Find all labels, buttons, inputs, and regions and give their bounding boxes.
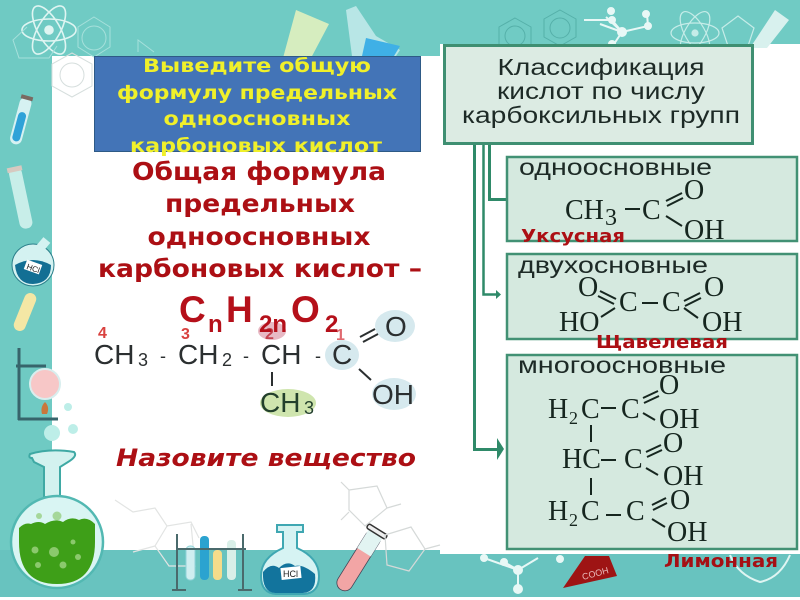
acetic acid formula: 3 — [605, 205, 617, 231]
panel: monobasic acids — [507, 154, 797, 247]
oxalic acid formula — [559, 272, 742, 338]
arrows: connectors — [474, 143, 508, 460]
white molecule bottom right — [481, 555, 563, 593]
citric acid formula — [548, 370, 707, 548]
acetic acid formula: CH — [565, 195, 604, 226]
structural formula with numbered carbons: CH — [261, 339, 301, 370]
panel: dibasic acids — [507, 252, 797, 353]
oxalic acid formula: OH — [702, 307, 742, 338]
icon: HCl flask left: HCl — [25, 262, 41, 275]
panel: task heading: одноосновных — [164, 108, 350, 130]
citric acid formula: 2 — [569, 510, 578, 530]
icon: pink test tube — [331, 524, 388, 595]
general formula text — [98, 157, 422, 283]
panel: task heading — [94, 55, 420, 157]
citric acid formula: C — [621, 394, 640, 425]
faint molecule bottom right — [341, 482, 440, 571]
formula CnH2nO2: O — [291, 289, 320, 330]
panel: task heading: Выведите общую — [143, 55, 371, 77]
icon: beaker — [283, 10, 329, 58]
icon: red flask bottom: COOH — [581, 565, 610, 582]
icon: green round flask — [11, 450, 103, 588]
formula CnH2nO2: C — [179, 289, 206, 330]
icon: atom top right — [671, 7, 754, 59]
citric acid formula: C — [581, 496, 600, 527]
structural formula with numbered carbons: 3 — [304, 398, 314, 418]
citric acid formula: H — [548, 394, 568, 425]
panel: classification title: Классификация — [498, 54, 704, 80]
icon: blue test tube — [9, 94, 33, 146]
oxalic acid formula: O — [578, 272, 598, 303]
icon: rising bubbles — [44, 403, 78, 441]
icon: HCl flask bottom: HCl — [283, 569, 298, 579]
structural formula with numbered carbons: CH — [94, 339, 134, 370]
acetic acid formula: C — [642, 195, 661, 226]
citric acid formula: C — [624, 444, 643, 475]
icon: pale test tube — [7, 165, 35, 230]
icon: flask corner bottom right — [730, 555, 790, 582]
oxalic acid formula: O — [704, 272, 724, 303]
citric acid formula: OH — [667, 517, 707, 548]
citric acid formula: OH — [663, 461, 703, 492]
icon: yellow test tube — [12, 291, 38, 333]
faint molecule bottom left — [115, 500, 199, 566]
general formula text: одноосновных — [148, 222, 370, 251]
structural formula with numbered carbons: - — [315, 346, 321, 366]
formula CnH2nO2: H — [226, 289, 253, 330]
general formula text: Общая формула — [132, 157, 386, 186]
structural formula with numbered carbons: - — [160, 346, 166, 366]
acid name: acetic: Уксусная — [521, 226, 625, 247]
call to action: Назовите вещество — [116, 444, 416, 472]
panel: polybasic acids — [507, 352, 797, 549]
structural formula with numbered carbons: O — [385, 311, 407, 342]
general formula text: карбоновых кислот – — [98, 254, 422, 283]
structural formula with numbered carbons: C — [332, 339, 352, 370]
structural formula with numbered carbons: 3 — [138, 350, 148, 370]
panel: polybasic acids: многоосновные — [518, 352, 726, 378]
citric acid formula: H — [548, 496, 568, 527]
acid name: citric: Лимонная — [664, 551, 778, 572]
panel: task heading: карбоновых кислот — [130, 135, 382, 157]
icon: white molecule — [584, 8, 651, 47]
formula CnH2nO2: n — [208, 311, 223, 338]
citric acid formula: OH — [659, 404, 699, 435]
icon: burner stand — [16, 348, 60, 420]
citric acid formula: HC — [562, 444, 601, 475]
panel: classification title: кислот по числу — [497, 78, 706, 104]
oxalic acid formula: HO — [559, 307, 599, 338]
acetic acid formula: OH — [684, 215, 724, 246]
panel: classification title — [444, 46, 752, 144]
structural formula with numbered carbons: 2 — [222, 350, 232, 370]
panel: dibasic acids: двухосновные — [518, 252, 708, 278]
structural formula with numbered carbons: OH — [372, 379, 414, 410]
citric acid formula: O — [663, 428, 683, 459]
acetic acid formula: O — [684, 175, 704, 206]
formula CnH2nO2 — [179, 289, 338, 338]
citric acid formula: C — [626, 496, 645, 527]
structural formula with numbered carbons: 2 — [265, 326, 274, 343]
icon: HCl flask left — [12, 237, 54, 286]
formula CnH2nO2: 2n — [259, 311, 287, 338]
icon: red flask bottom — [563, 556, 617, 588]
molecule sketch top right — [499, 10, 576, 54]
icon: hexagon molecule left — [52, 53, 92, 97]
citric acid formula: C — [581, 394, 600, 425]
icon: blue flask — [346, 6, 400, 56]
icon: test tube rack — [172, 534, 252, 590]
icon: HCl flask bottom — [261, 525, 319, 594]
structural formula with numbered carbons: 4 — [98, 325, 107, 342]
structural formula with numbered carbons — [94, 310, 416, 418]
structural formula with numbered carbons: CH — [260, 387, 300, 418]
icon: test tube top right — [750, 10, 789, 48]
acetic acid formula — [565, 175, 724, 246]
citric acid formula: O — [659, 370, 679, 401]
structural formula with numbered carbons: CH — [178, 339, 218, 370]
acid name: oxalic: Щавелевая — [596, 332, 728, 353]
structural formula with numbered carbons: 3 — [181, 326, 190, 343]
citric acid formula: O — [670, 485, 690, 516]
oxalic acid formula: C — [619, 287, 638, 318]
panel: task heading: формулу предельных — [117, 82, 397, 104]
formula CnH2nO2: 2 — [325, 311, 338, 338]
structural formula with numbered carbons: - — [243, 346, 249, 366]
panel: monobasic acids: одноосновные — [519, 154, 712, 180]
structural formula with numbered carbons: 1 — [336, 327, 345, 344]
citric acid formula: 2 — [569, 408, 578, 428]
general formula text: предельных — [165, 189, 355, 218]
icon: atom top left — [13, 1, 154, 59]
panel: classification title: карбоксильных групп — [462, 102, 740, 128]
oxalic acid formula: C — [662, 287, 681, 318]
